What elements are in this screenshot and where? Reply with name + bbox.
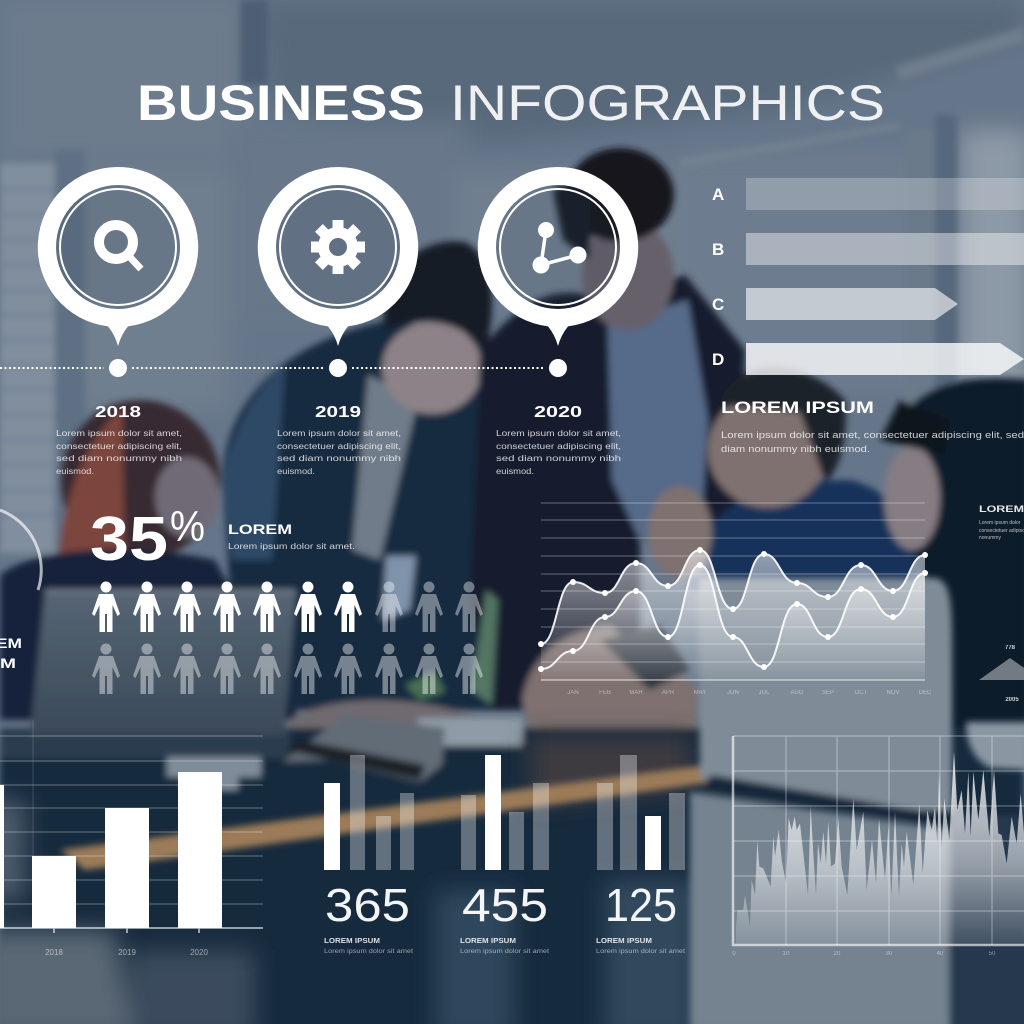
stat: 35 percent: Lorem ipsum dolor sit amet.: [228, 542, 355, 551]
timeline text 2020: [496, 404, 621, 476]
month labels: FEB: [599, 690, 611, 696]
paper stack: [167, 757, 261, 790]
stat: 35 percent: %: [170, 503, 205, 551]
right laptop: [698, 578, 952, 815]
notebook: [283, 715, 445, 782]
timeline text 2020: euismod.: [496, 467, 534, 476]
bar A: [712, 178, 1024, 210]
timeline text 2018: consectetuer adipiscing elit,: [56, 442, 182, 451]
table: [0, 728, 1024, 1024]
stat: 35 percent: [90, 503, 355, 574]
timeline text 2019: 2019: [315, 404, 361, 421]
timeline text 2018: euismod.: [56, 467, 94, 476]
month labels: MAR: [629, 690, 643, 696]
axis labels: 2018: [45, 948, 63, 957]
right edge lorem text: [979, 504, 1024, 541]
right edge lorem text: Lorem ipsum dolor: [979, 520, 1021, 526]
timeline dotted line: [0, 359, 567, 377]
stat: 35 percent: LOREM: [228, 521, 292, 537]
lorem ipsum text block: LOREM IPSUM: [721, 398, 874, 417]
timeline text 2020: 2020: [534, 404, 582, 421]
axis labels: 10: [783, 951, 790, 957]
chart grid: [541, 503, 925, 662]
ceiling details: [895, 27, 1024, 80]
soft table reflections: [0, 735, 695, 1024]
lower right table reflection: [690, 792, 950, 1024]
bar C: C: [712, 295, 724, 314]
spiky area chart bottom right: [732, 736, 1024, 957]
timeline text 2019: consectetuer adipiscing elit,: [277, 442, 401, 451]
month labels: JUL: [759, 690, 770, 696]
month labels: OCT: [855, 690, 868, 696]
woman right: [905, 378, 1024, 730]
woman with red hair: [60, 400, 220, 560]
timeline text 2020: consectetuer adipiscing elit,: [496, 442, 621, 451]
month labels: APR: [662, 690, 675, 696]
month labels: DEC: [919, 690, 932, 696]
mini bar stat 125: [596, 755, 685, 955]
series lines: [541, 550, 925, 644]
mini bar stat 125: 125: [605, 879, 677, 931]
man 3 jacket, shirt, head: [470, 275, 745, 710]
axis labels: 50: [989, 951, 996, 957]
mini bar stat 365: LOREM IPSUM: [324, 938, 380, 945]
timeline text 2019: Lorem ipsum dolor sit amet,: [277, 429, 401, 438]
pin: gear 2019: [258, 167, 418, 346]
bars: [0, 772, 222, 928]
gauge arc cut off at left: M: [0, 655, 16, 671]
small triangle chart at right edge: [979, 645, 1024, 703]
bar B: [712, 233, 1024, 265]
pin: network 2020: [478, 167, 638, 346]
gauge arc cut off at left: [0, 510, 41, 671]
horizontal arrow bars A to D: [712, 178, 1024, 375]
axis labels: [45, 948, 208, 957]
hands and plant: [287, 700, 497, 735]
right edge lorem text: LOREM: [979, 504, 1024, 514]
timeline text 2019: sed diam nonummy nibh: [277, 454, 401, 463]
month labels: JAN: [567, 690, 579, 696]
title: [137, 75, 885, 131]
axis labels: 30: [886, 951, 893, 957]
timeline text 2020: sed diam nonummy nibh: [496, 454, 621, 463]
timeline text 2019: euismod.: [277, 467, 315, 476]
month labels: JUN: [727, 690, 739, 696]
mini bar stat 365: [324, 755, 414, 955]
icon: magnifier: [99, 225, 141, 269]
stat: 35 percent: 35: [90, 505, 168, 574]
month labels: NOV: [886, 690, 900, 696]
bar chart bottom left: [0, 720, 263, 957]
window blinds: [0, 163, 55, 553]
pin: search 2018: [38, 167, 198, 346]
timeline text 2020: Lorem ipsum dolor sit amet,: [496, 429, 621, 438]
icon: network nodes: [532, 222, 586, 274]
mini bar stat 455: LOREM IPSUM: [460, 938, 516, 945]
month labels: SEP: [822, 690, 834, 696]
man 2 suit: [222, 320, 500, 710]
chart grid: [733, 736, 1024, 945]
line chart: [538, 503, 932, 696]
chart grid: [0, 736, 263, 904]
mini bar stat 455: 455: [462, 879, 548, 931]
axis labels: 20: [834, 951, 841, 957]
timeline text 2019: [277, 404, 401, 476]
man 4 laughing: [690, 480, 920, 590]
mini bar stat 455: [460, 755, 549, 955]
mini bar stat 125: Lorem ipsum dolor sit amet: [596, 948, 685, 955]
mini bar stat 365: Lorem ipsum dolor sit amet: [324, 948, 413, 955]
small triangle chart at right edge: 778: [1005, 645, 1016, 651]
mini bar stat 125: LOREM IPSUM: [596, 938, 652, 945]
axis labels: [732, 951, 996, 957]
right edge lorem text: nonummy: [979, 535, 1001, 541]
data points: [538, 547, 928, 672]
axis labels: 2019: [118, 948, 136, 957]
icon: gear: [311, 220, 365, 274]
people row: muted: [92, 644, 483, 694]
timeline text 2018: Lorem ipsum dolor sit amet,: [56, 429, 182, 438]
cup shape: [966, 722, 1024, 770]
bar D: [712, 343, 1024, 375]
title: INFOGRAPHICS: [450, 75, 885, 131]
bar B: B: [712, 240, 724, 259]
mini bar stat 455: Lorem ipsum dolor sit amet: [460, 948, 549, 955]
title: BUSINESS: [137, 75, 425, 131]
people row: filled: [92, 582, 483, 632]
axis labels: 40: [937, 951, 944, 957]
area series: [736, 752, 1024, 945]
timeline text 2018: [56, 404, 182, 476]
small triangle chart at right edge: 2005: [1005, 697, 1019, 703]
timeline text 2018: 2018: [95, 404, 141, 421]
mini bar stat 365: 365: [325, 879, 410, 931]
month labels: AUG: [790, 690, 804, 696]
table edge orange: [60, 765, 706, 870]
month labels: [567, 690, 932, 696]
lorem ipsum text block: Lorem ipsum dolor sit amet, consectetuer adipiscing elit, sed: [721, 430, 1024, 440]
series fills: [541, 550, 925, 680]
timeline text 2018: sed diam nonummy nibh: [56, 454, 182, 463]
lorem ipsum text block: [721, 398, 1024, 454]
bar C: [712, 288, 958, 320]
bar D: D: [712, 350, 724, 369]
lorem ipsum text block: diam nonummy nibh euismod.: [721, 444, 870, 454]
axis labels: 0: [732, 951, 736, 957]
left laptop: [30, 590, 296, 735]
bar A: A: [712, 185, 724, 204]
axis labels: 2020: [190, 948, 208, 957]
month labels: MAY: [694, 690, 706, 696]
